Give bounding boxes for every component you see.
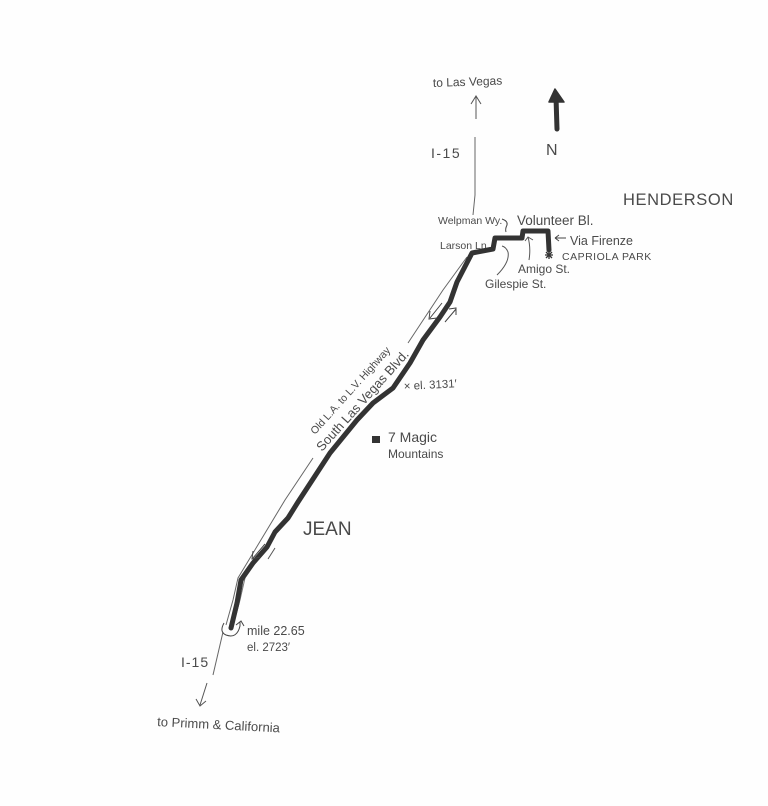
label: 7 Magic Mountains: Mountains [388,447,443,461]
label: Amigo St. [518,237,570,276]
label: to Primm & California: to Primm & California [157,714,281,735]
label: I-15 north: I-15 [431,145,461,161]
arrow: northbound upper [445,308,456,322]
label: South Las Vegas Blvd: South Las Vegas Blvd. [313,347,412,454]
icon: north arrow [549,89,564,129]
label: 7 Magic Mountains [388,429,443,461]
I-15 line north [473,137,475,215]
old highway line [226,257,467,625]
label: Jean: JEAN [303,519,352,540]
label: Volunteer Bl.: Volunteer Bl. [517,213,594,228]
label: el. 2723: el. 2723′ [247,642,290,654]
arrow: southbound lower [252,544,265,559]
arrow: to Las Vegas [471,96,481,119]
label: Larson Ln.: Larson Ln. [440,240,490,252]
main route [231,231,549,628]
label: elevation 3131: × el. 3131′ [404,378,457,393]
label: to Las Vegas: to Las Vegas [433,74,502,90]
arrow: to Primm [196,683,207,706]
marker: 7 Magic Mountains [372,436,380,443]
label: I-15 south: I-15 [181,654,209,670]
label: Capriola Park: CAPRIOLA PARK [562,251,652,263]
tick: northbound lower [268,548,275,559]
label: Welpman Wy.: Welpman Wy. [438,215,502,227]
arrow: southbound upper [429,303,442,319]
marker: Capriola Park [545,251,553,259]
label: 7 Magic Mountains: 7 Magic [388,429,437,445]
arrow: Welpman Wy. [502,219,507,232]
label: Henderson: HENDERSON [623,191,734,209]
label: old highway: Old L.A. to L.V. Highway [308,344,394,437]
label: mile 22.65: mile 22.65 [247,624,305,638]
label: Gilespie St. [485,246,546,291]
frontage line [234,578,245,622]
label: Amigo St.: Amigo St. [518,262,570,276]
label: N: N [546,142,558,159]
label: Gilespie St.: Gilespie St. [485,277,546,291]
u-turn at mile 22.65 [222,621,244,636]
label: Via Firenze: Via Firenze [570,234,633,248]
I-15 line south [213,632,223,675]
